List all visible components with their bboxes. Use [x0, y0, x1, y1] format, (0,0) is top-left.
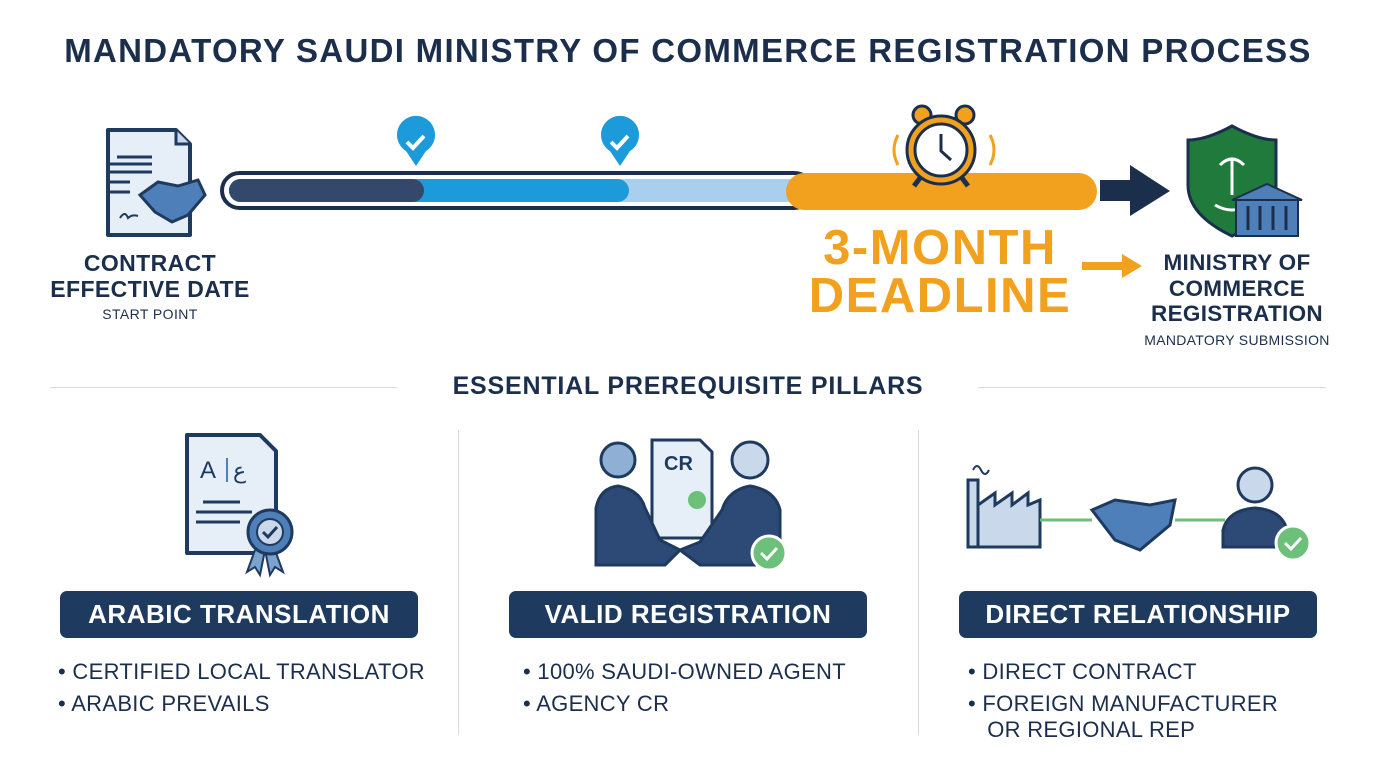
text: ministry of commerce registration: COMMERCE [1169, 276, 1305, 300]
text: contract effective date: EFFECTIVE DATE [50, 276, 250, 302]
icon: alarm clock [894, 106, 994, 186]
text: contract effective date: CONTRACT [84, 250, 216, 276]
bullets: arabic translation [58, 659, 425, 716]
pillar button: direct relationship: DIRECT RELATIONSHIP [985, 599, 1291, 629]
bullets: valid registration [523, 659, 846, 716]
text: 3-month deadline: DEADLINE [809, 269, 1071, 323]
title: MANDATORY SAUDI MINISTRY OF COMMERCE REGISTRATION PROCESS [64, 32, 1312, 69]
timeline graphic [106, 104, 1302, 278]
text: ministry of commerce registration [1144, 250, 1330, 348]
bullets: arabic translation: • CERTIFIED LOCAL TRANSLATOR [58, 659, 425, 684]
icons: pillars [185, 433, 1308, 578]
orange deadline bar [786, 173, 1097, 210]
pillar button: valid registration: VALID REGISTRATION [545, 599, 831, 629]
pillar button: arabic translation [60, 591, 418, 638]
icon: translated certificate [187, 435, 292, 575]
bullets: valid registration: • AGENCY CR [523, 691, 669, 716]
bullets: direct relationship: • FOREIGN MANUFACTURER [968, 691, 1278, 716]
bullets: direct relationship: OR REGIONAL REP [987, 717, 1195, 742]
icon: agents handshake with CR [596, 440, 786, 570]
bullets: valid registration: • 100% SAUDI-OWNED AGENT [523, 659, 846, 684]
icon: factory to rep [968, 466, 1310, 560]
arrow: dark to ministry [1100, 165, 1170, 216]
icon: shield with building [1188, 126, 1302, 236]
section heading: ESSENTIAL PREREQUISITE PILLARS [453, 372, 923, 400]
text: 3-month deadline: 3-MONTH [823, 221, 1057, 275]
pillar button: direct relationship [959, 591, 1317, 638]
pillar button: valid registration [509, 591, 867, 638]
bullets: arabic translation: • ARABIC PREVAILS [58, 691, 270, 716]
icon: agents handshake with CR: CR [664, 453, 693, 475]
icon: translated certificate: A [200, 457, 216, 484]
text: ministry of commerce registration: MANDATORY SUBMISSION [1144, 332, 1330, 348]
arrow: orange small [1082, 254, 1142, 278]
pillar button: arabic translation: ARABIC TRANSLATION [88, 599, 390, 629]
text: contract effective date: START POINT [102, 306, 198, 322]
bullets: direct relationship: • DIRECT CONTRACT [968, 659, 1197, 684]
bullets: direct relationship [968, 659, 1278, 742]
progress track [222, 173, 812, 208]
text: ministry of commerce registration: MINISTRY OF [1163, 250, 1311, 275]
icon: contract document [108, 130, 205, 235]
icon: check pin 1 [397, 116, 435, 166]
icon: translated certificate: ع [233, 459, 246, 484]
text: 3-month deadline [809, 221, 1071, 323]
text: ministry of commerce registration: REGISTRATION [1151, 301, 1323, 326]
text: contract effective date [50, 250, 250, 322]
icon: check pin 2 [601, 116, 639, 166]
